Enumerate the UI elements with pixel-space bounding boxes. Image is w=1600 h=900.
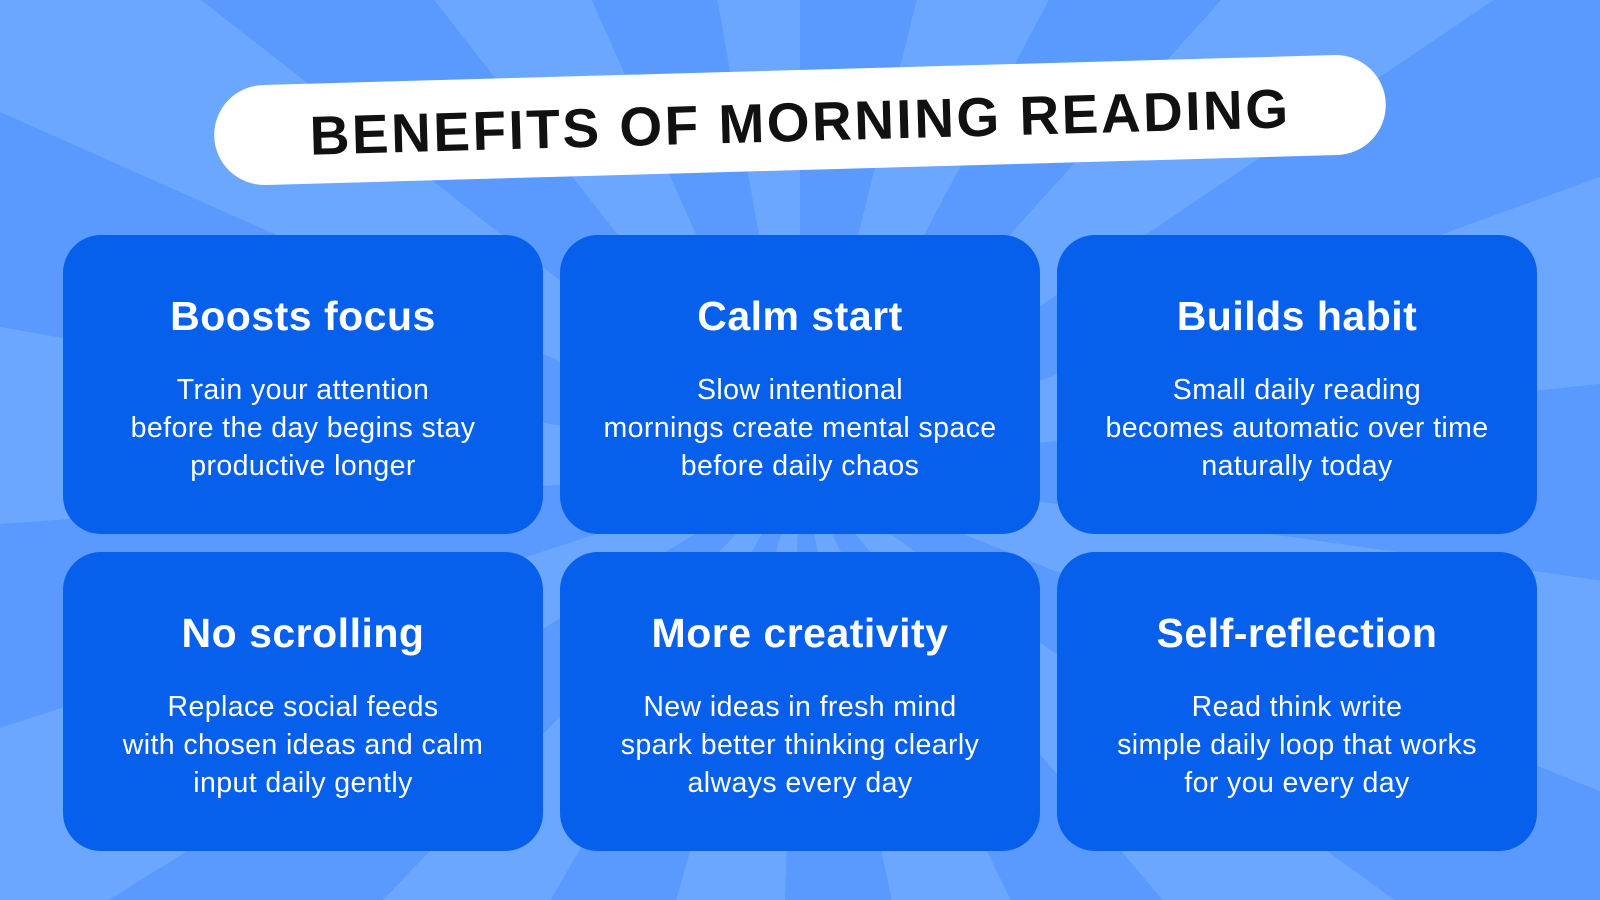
panel: boosts focus: before the day begins stay — [131, 412, 475, 444]
panel: boosts focus: Boosts focus — [170, 293, 436, 339]
panel: self-reflection — [1057, 552, 1537, 851]
panel: more creativity: always every day — [688, 767, 912, 799]
title — [213, 54, 1387, 186]
panel: builds habit — [1057, 235, 1537, 534]
panel: builds habit: becomes automatic over time — [1105, 412, 1489, 444]
panel: boosts focus: productive longer — [190, 450, 416, 482]
title: BENEFITS OF MORNING READING — [309, 77, 1291, 167]
panel: self-reflection: Self-reflection — [1157, 610, 1437, 656]
panel: self-reflection: Read think write — [1192, 691, 1402, 723]
panel: no scrolling: with chosen ideas and calm — [123, 729, 483, 761]
panel: self-reflection: simple daily loop that works — [1117, 729, 1477, 761]
panel: calm start: Slow intentional — [697, 374, 903, 406]
panel: no scrolling: input daily gently — [193, 767, 413, 799]
panel: more creativity: spark better thinking clearly — [621, 729, 979, 761]
panel: calm start: before daily chaos — [681, 450, 919, 482]
panel: more creativity — [560, 552, 1040, 851]
panel: calm start — [560, 235, 1040, 534]
panel: calm start: Calm start — [697, 293, 903, 339]
panel: boosts focus — [63, 235, 543, 534]
panel: no scrolling: Replace social feeds — [168, 691, 438, 723]
panel: builds habit: Builds habit — [1177, 293, 1417, 339]
panel: calm start: mornings create mental space — [604, 412, 996, 444]
panel: more creativity: New ideas in fresh mind — [643, 691, 957, 723]
panel: builds habit: naturally today — [1201, 450, 1393, 482]
panel: more creativity: More creativity — [652, 610, 948, 656]
panel: no scrolling: No scrolling — [182, 610, 424, 656]
panel: boosts focus: Train your attention — [177, 374, 429, 406]
panel: no scrolling — [63, 552, 543, 851]
panel: builds habit: Small daily reading — [1173, 374, 1421, 406]
panel: self-reflection: for you every day — [1184, 767, 1410, 799]
